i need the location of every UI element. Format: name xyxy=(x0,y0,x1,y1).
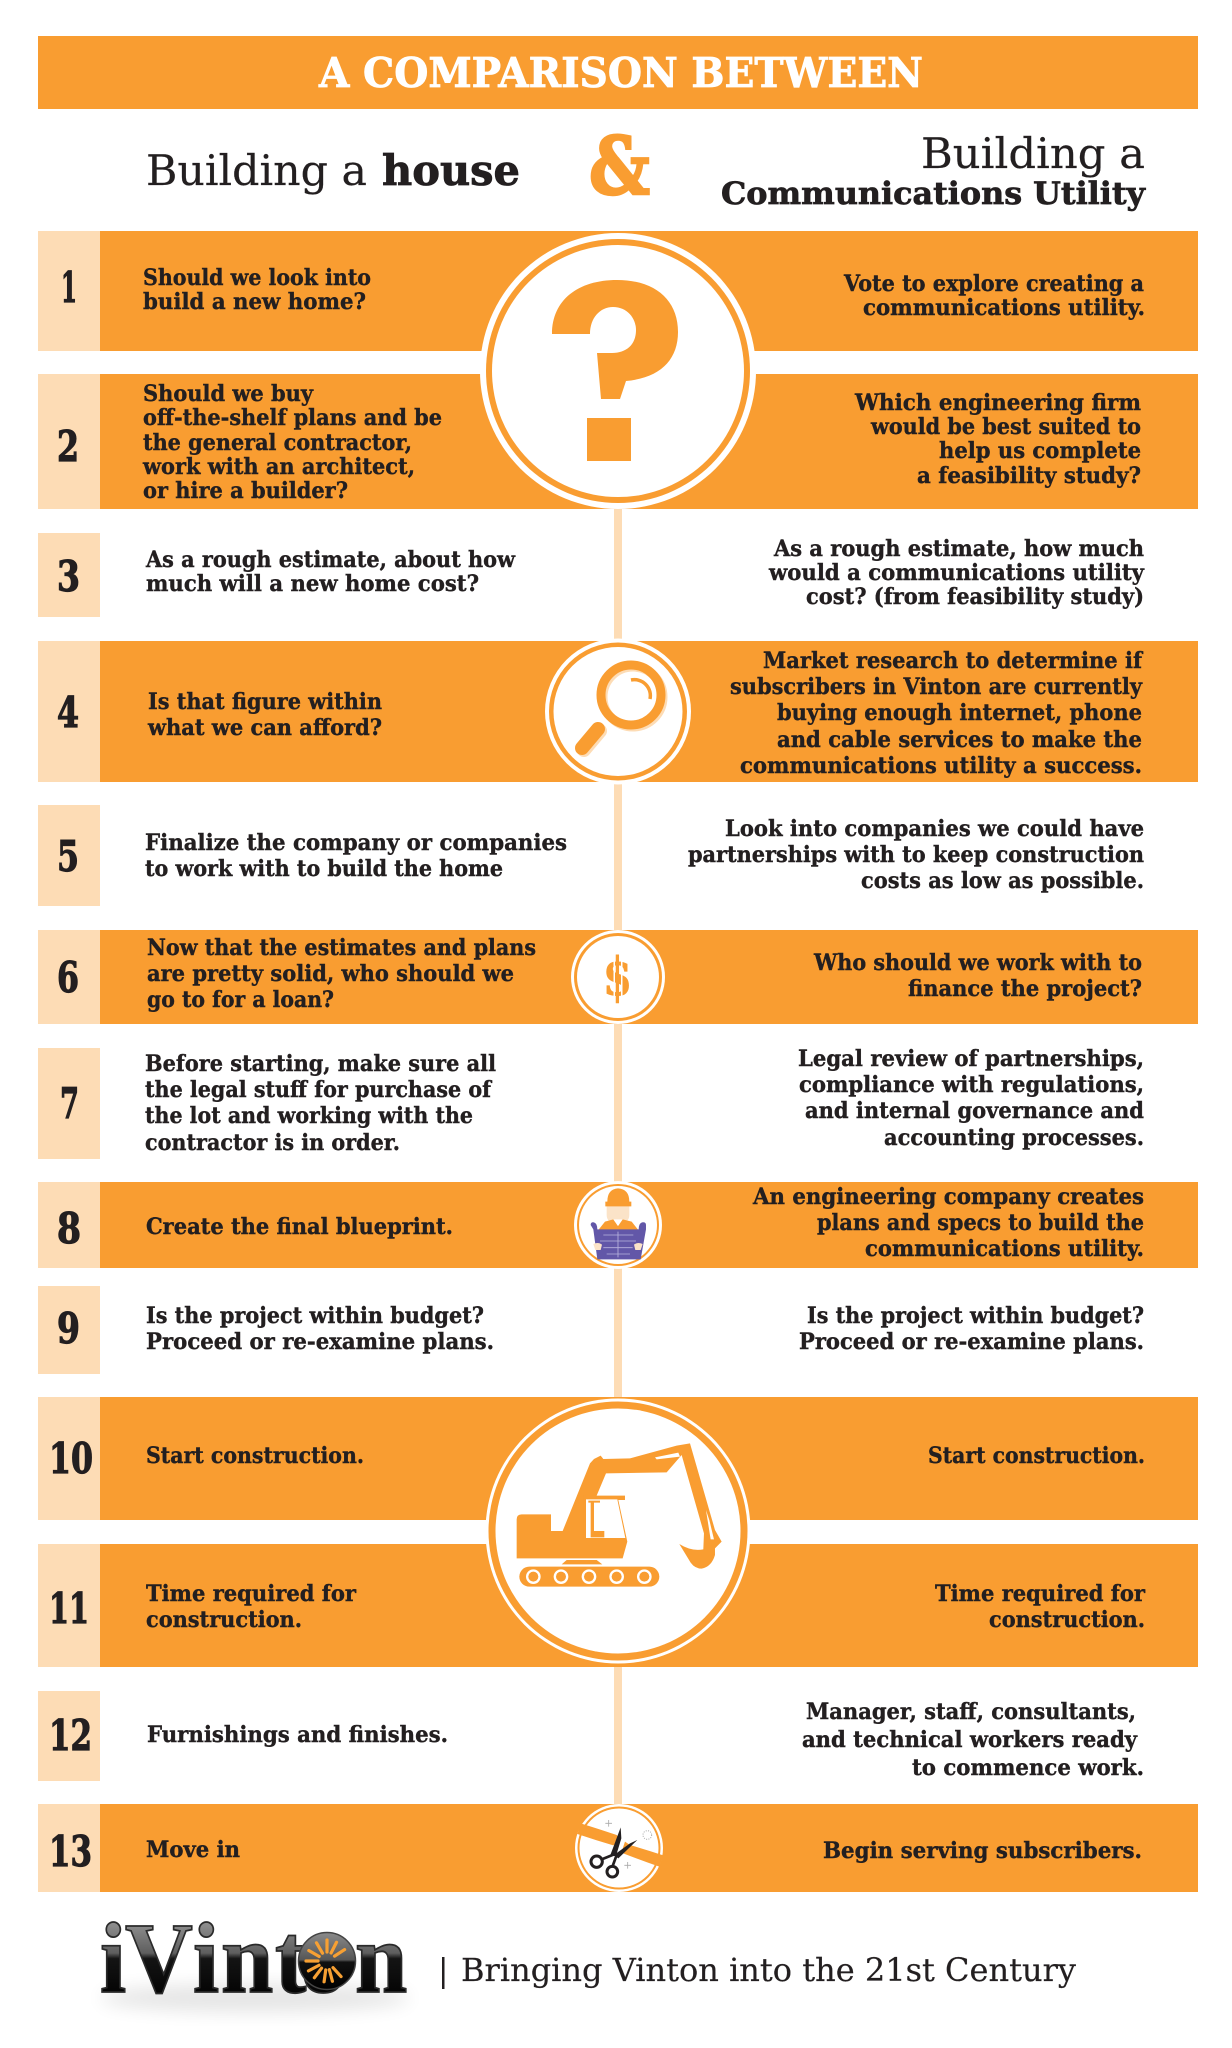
row 3: As a rough estimate, about how xyxy=(145,547,516,573)
heading: building a house xyxy=(146,146,520,195)
row 7: 7 xyxy=(60,1079,79,1128)
heading: building a communications utility xyxy=(721,129,1146,212)
row 11: construction. xyxy=(989,1607,1145,1633)
row 3: 3 xyxy=(57,552,80,601)
row 2: the general contractor, xyxy=(143,430,412,456)
row 8: 8 xyxy=(57,1204,81,1253)
row 1 xyxy=(38,231,1198,351)
row 10: Start construction. xyxy=(146,1443,364,1469)
row 3: cost? (from feasibility study) xyxy=(806,584,1144,610)
row 8 xyxy=(38,1182,1198,1268)
row 2: work with an architect, xyxy=(142,454,415,480)
row 13 xyxy=(38,1804,1198,1892)
row 13: Move in xyxy=(146,1837,240,1863)
row 8: An engineering company creates xyxy=(752,1184,1144,1210)
row 7: and internal governance and xyxy=(805,1098,1144,1124)
row 1: build a new home? xyxy=(143,289,366,315)
row 4: Market research to determine if xyxy=(763,648,1143,674)
row 5: Finalize the company or companies xyxy=(145,830,567,856)
icon: scissors cutting ribbon xyxy=(575,1804,663,1892)
row 3: much will a new home cost? xyxy=(146,571,479,597)
logo: iVinton: iVinton xyxy=(100,1903,407,2015)
row 12: and technical workers ready xyxy=(802,1727,1138,1753)
row 3: As a rough estimate, how much xyxy=(773,536,1144,562)
row 11: construction. xyxy=(146,1607,302,1633)
row 7 xyxy=(38,1046,1144,1159)
row 4: 4 xyxy=(57,688,79,737)
row 6 xyxy=(38,930,1198,1024)
row 6: 6 xyxy=(57,953,79,1002)
tagline: Bringing Vinton into the 21st Century xyxy=(461,1951,1076,1989)
row 1: Vote to explore creating a xyxy=(843,271,1144,297)
title banner: A COMPARISON BETWEEN xyxy=(318,49,923,97)
row 4: what we can afford? xyxy=(147,715,382,741)
row 1: 1 xyxy=(61,263,77,312)
heading: building a house: Building a xyxy=(146,146,367,195)
icon: engineer with blueprint xyxy=(574,1181,662,1269)
row 5: partnerships with to keep construction xyxy=(688,842,1144,868)
row 7: accounting processes. xyxy=(884,1125,1144,1151)
row 7: the legal stuff for purchase of xyxy=(145,1077,492,1103)
row 9: Is the project within budget? xyxy=(807,1303,1144,1329)
row 5: to work with to build the home xyxy=(145,856,503,882)
row 3 xyxy=(38,533,1145,617)
row 12: 12 xyxy=(49,1711,92,1760)
row 8: communications utility. xyxy=(865,1236,1144,1262)
row 4: and cable services to make the xyxy=(777,727,1142,753)
row 4 xyxy=(38,641,1198,782)
row 6: Who should we work with to xyxy=(813,950,1142,976)
title banner xyxy=(38,36,1198,109)
row 4: buying enough internet, phone xyxy=(777,700,1142,726)
icon: dollar sign: $ xyxy=(603,947,632,1008)
row 7: the lot and working with the xyxy=(145,1103,473,1129)
icon: dollar sign xyxy=(571,930,665,1024)
row 5: 5 xyxy=(57,832,79,881)
row 4: communications utility a success. xyxy=(740,753,1142,779)
row 6: are pretty solid, who should we xyxy=(147,961,514,987)
icon: question mark xyxy=(480,233,756,509)
row 10 xyxy=(38,1397,1198,1520)
row 12: to commence work. xyxy=(912,1755,1144,1781)
heading: building a communications utility: Building a xyxy=(921,129,1145,178)
row 11: Time required for xyxy=(935,1581,1145,1607)
row 9: Is the project within budget? xyxy=(146,1303,484,1329)
row 7: compliance with regulations, xyxy=(799,1072,1144,1098)
row 1: Should we look into xyxy=(143,265,371,291)
row 12 xyxy=(38,1691,1144,1781)
row 4: Is that figure within xyxy=(148,689,382,715)
row 9: Proceed or re-examine plans. xyxy=(799,1329,1144,1355)
row 9 xyxy=(38,1286,1144,1374)
row 2: Should we buy xyxy=(143,381,314,407)
row 2: or hire a builder? xyxy=(143,478,348,504)
row 4: subscribers in Vinton are currently xyxy=(730,674,1143,700)
row 2 xyxy=(38,374,1198,509)
row 9: Proceed or re-examine plans. xyxy=(146,1329,494,1355)
row 7: contractor is in order. xyxy=(145,1130,400,1156)
row 8: plans and specs to build the xyxy=(817,1210,1144,1236)
row 10: 10 xyxy=(49,1434,93,1483)
row 13: Begin serving subscribers. xyxy=(823,1838,1142,1864)
row 9: 9 xyxy=(57,1304,80,1353)
row 7: Before starting, make sure all xyxy=(145,1051,496,1077)
ampersand: & xyxy=(589,119,650,213)
row 12: Furnishings and finishes. xyxy=(147,1722,448,1748)
row 2: would be best suited to xyxy=(870,414,1141,440)
row 10: Start construction. xyxy=(928,1443,1145,1469)
row 13: 13 xyxy=(49,1827,92,1876)
row 11: Time required for xyxy=(146,1581,356,1607)
row 3: would a communications utility xyxy=(768,560,1145,586)
row 11: 11 xyxy=(49,1584,89,1633)
center connector line xyxy=(614,500,622,1810)
heading: building a house: house xyxy=(382,146,520,195)
row 6: finance the project? xyxy=(908,976,1142,1002)
row 5: Look into companies we could have xyxy=(725,816,1144,842)
row 2: off-the-shelf plans and be xyxy=(143,405,442,431)
row 7: Legal review of partnerships, xyxy=(798,1046,1144,1072)
row 5: costs as low as possible. xyxy=(861,868,1144,894)
row 2: 2 xyxy=(57,422,79,471)
heading: building a communications utility: Communications Utility xyxy=(721,176,1146,212)
row 6: go to for a loan? xyxy=(147,987,334,1013)
row 12: Manager, staff, consultants, xyxy=(806,1699,1136,1725)
row 1: communications utility. xyxy=(863,295,1145,321)
row 6: Now that the estimates and plans xyxy=(147,935,536,961)
row 8: Create the final blueprint. xyxy=(146,1214,453,1240)
row 11 xyxy=(38,1544,1198,1667)
row 2: Which engineering firm xyxy=(854,390,1141,416)
row 5 xyxy=(38,805,1144,906)
icon: excavator xyxy=(486,1398,750,1664)
icon: magnifying glass xyxy=(545,638,691,784)
row 2: help us complete xyxy=(939,438,1141,464)
row 2: a feasibility study? xyxy=(917,463,1141,489)
